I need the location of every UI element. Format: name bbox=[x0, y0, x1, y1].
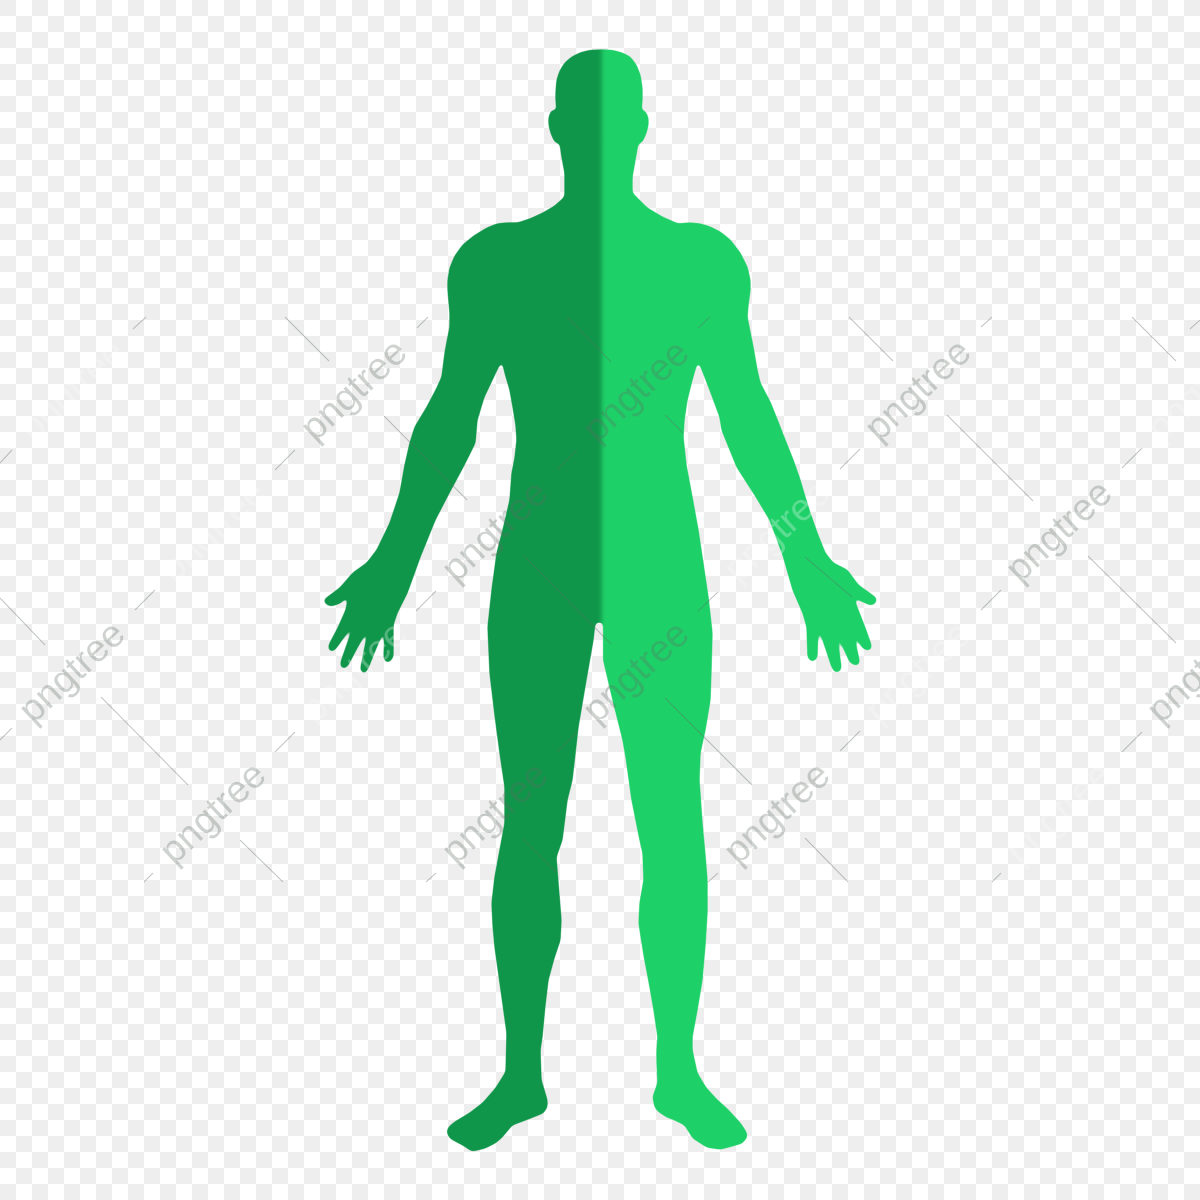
watermark text: pngtree bbox=[998, 472, 1120, 590]
watermark text: pngtree bbox=[152, 754, 274, 872]
faint watermarks bbox=[11, 331, 1200, 872]
figure: light green right half bbox=[602, 50, 876, 1149]
watermarks: pngtree text over the figure bbox=[11, 331, 1200, 872]
watermark text: pngtree bbox=[575, 332, 697, 450]
watermark text: pngtree bbox=[293, 331, 415, 449]
watermark text: pngtree bbox=[11, 613, 133, 731]
watermark text: pngtree bbox=[434, 472, 556, 590]
human figure bbox=[324, 50, 876, 1151]
faint watermark text: pngtree bbox=[293, 613, 415, 731]
watermark text: pngtree bbox=[575, 613, 697, 731]
faint watermark text: pngtree bbox=[11, 331, 133, 449]
watermark text: pngtree bbox=[434, 754, 556, 872]
figure: dark green left half bbox=[324, 50, 604, 1151]
watermark text: pngtree bbox=[857, 331, 979, 449]
faint watermark text: pngtree bbox=[152, 472, 274, 590]
faint watermark text: pngtree bbox=[716, 472, 838, 590]
faint watermark text: pngtree bbox=[998, 754, 1120, 872]
faint watermark text: pngtree bbox=[857, 613, 979, 731]
watermark text: pngtree bbox=[716, 754, 838, 872]
